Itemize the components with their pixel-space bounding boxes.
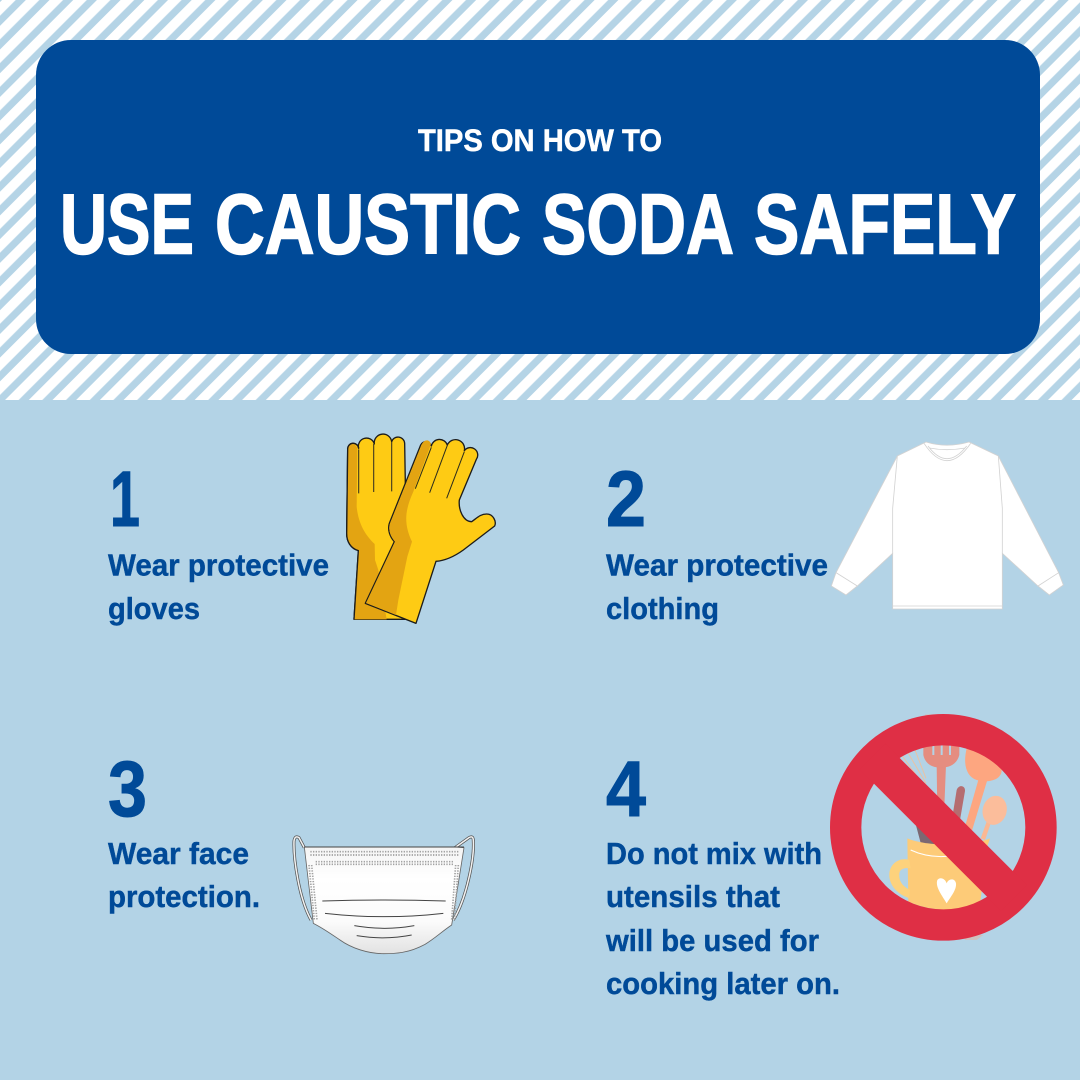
tip 4: do not mix with cooking utensils (605, 714, 1041, 1001)
number 1: 1 (110, 454, 140, 543)
main title: SAFELY (754, 177, 1016, 272)
tip 3 text: protection. (108, 879, 260, 914)
tip 4 text: Do not mix with (606, 836, 822, 871)
icon: rubber gloves (347, 434, 495, 623)
light blue content panel (0, 400, 1080, 1080)
main title: CAUSTIC (215, 177, 521, 272)
tip 3 text: Wear face (108, 836, 249, 871)
tip 1: gloves (108, 434, 495, 626)
striped header background (0, 0, 1080, 400)
main title: SODA (542, 177, 734, 272)
tip 1 text (108, 548, 329, 626)
tip 1 text: Wear protective (108, 548, 329, 582)
icon: surgical mask (294, 837, 473, 954)
tip 2 text (606, 548, 828, 626)
tip 2 text: Wear protective (606, 548, 828, 582)
tip 4 text: utensils that (606, 879, 780, 914)
tip 4 text (605, 836, 840, 1001)
subtitle: TIPS ON HOW TO (418, 122, 662, 158)
number 2: 2 (606, 454, 646, 543)
number 3: 3 (108, 744, 147, 833)
tip 3 text (108, 836, 260, 914)
icon: prohibited utensils (846, 714, 1041, 940)
main title: USE (60, 177, 194, 272)
tip 2: clothing (606, 442, 1063, 626)
number 4: 4 (606, 744, 646, 833)
main title (60, 177, 1016, 272)
title banner (36, 40, 1040, 354)
tip 4 text: will be used for (605, 923, 819, 958)
tip 4 text: cooking later on. (606, 966, 840, 1001)
icon: long sleeve shirt (831, 442, 1063, 609)
tip 2 text: clothing (606, 591, 719, 626)
tip 1 text: gloves (108, 591, 200, 626)
tip 3: face protection (108, 744, 473, 954)
